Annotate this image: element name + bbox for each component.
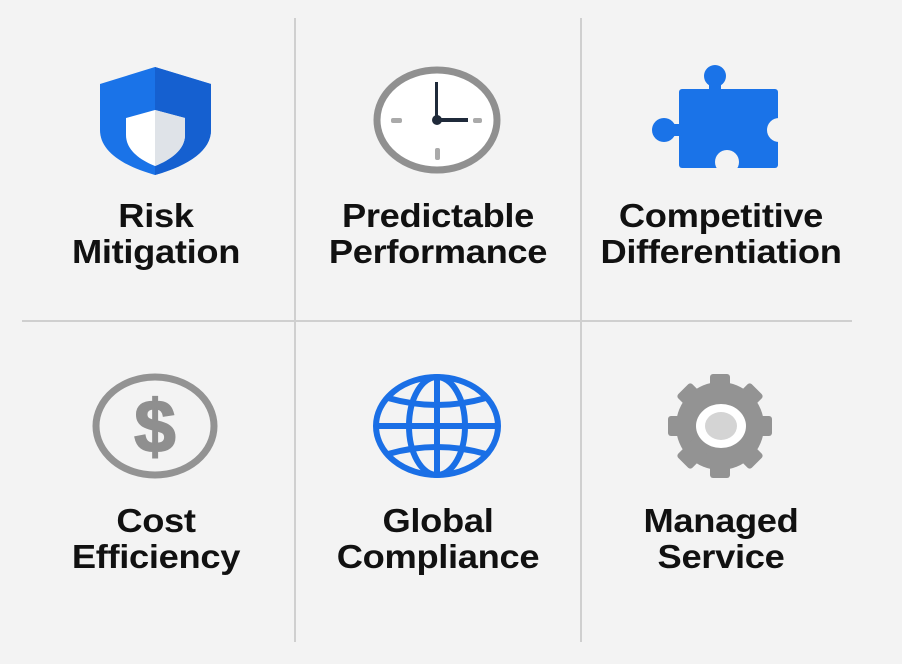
icon: dollar — [96, 377, 214, 475]
title: cost efficiency — [72, 502, 240, 575]
title: competitive differentiation: Differentiation — [600, 233, 842, 270]
title: risk mitigation: Mitigation — [72, 233, 240, 270]
icon: shield — [100, 67, 211, 175]
title: cost efficiency: Cost — [116, 502, 196, 539]
title: predictable performance: Predictable — [342, 197, 534, 234]
icon: dollar: $ — [134, 385, 176, 468]
title: global compliance: Global — [383, 502, 493, 539]
icon: globe — [376, 377, 498, 475]
icon: gear — [668, 374, 772, 478]
title: risk mitigation — [72, 197, 240, 270]
title: global compliance: Compliance — [337, 538, 539, 575]
title: managed service: Service — [658, 538, 784, 575]
title: cost efficiency: Efficiency — [72, 538, 240, 575]
icon: clock — [377, 70, 497, 170]
title: risk mitigation: Risk — [118, 197, 194, 234]
title: predictable performance: Performance — [329, 233, 547, 270]
title: managed service: Managed — [643, 502, 798, 539]
title: competitive differentiation — [600, 197, 842, 270]
title: predictable performance — [329, 197, 547, 270]
title: global compliance — [337, 502, 539, 575]
title: competitive differentiation: Competitive — [619, 197, 823, 234]
icon: puzzle — [652, 65, 791, 174]
title: managed service — [643, 502, 798, 575]
